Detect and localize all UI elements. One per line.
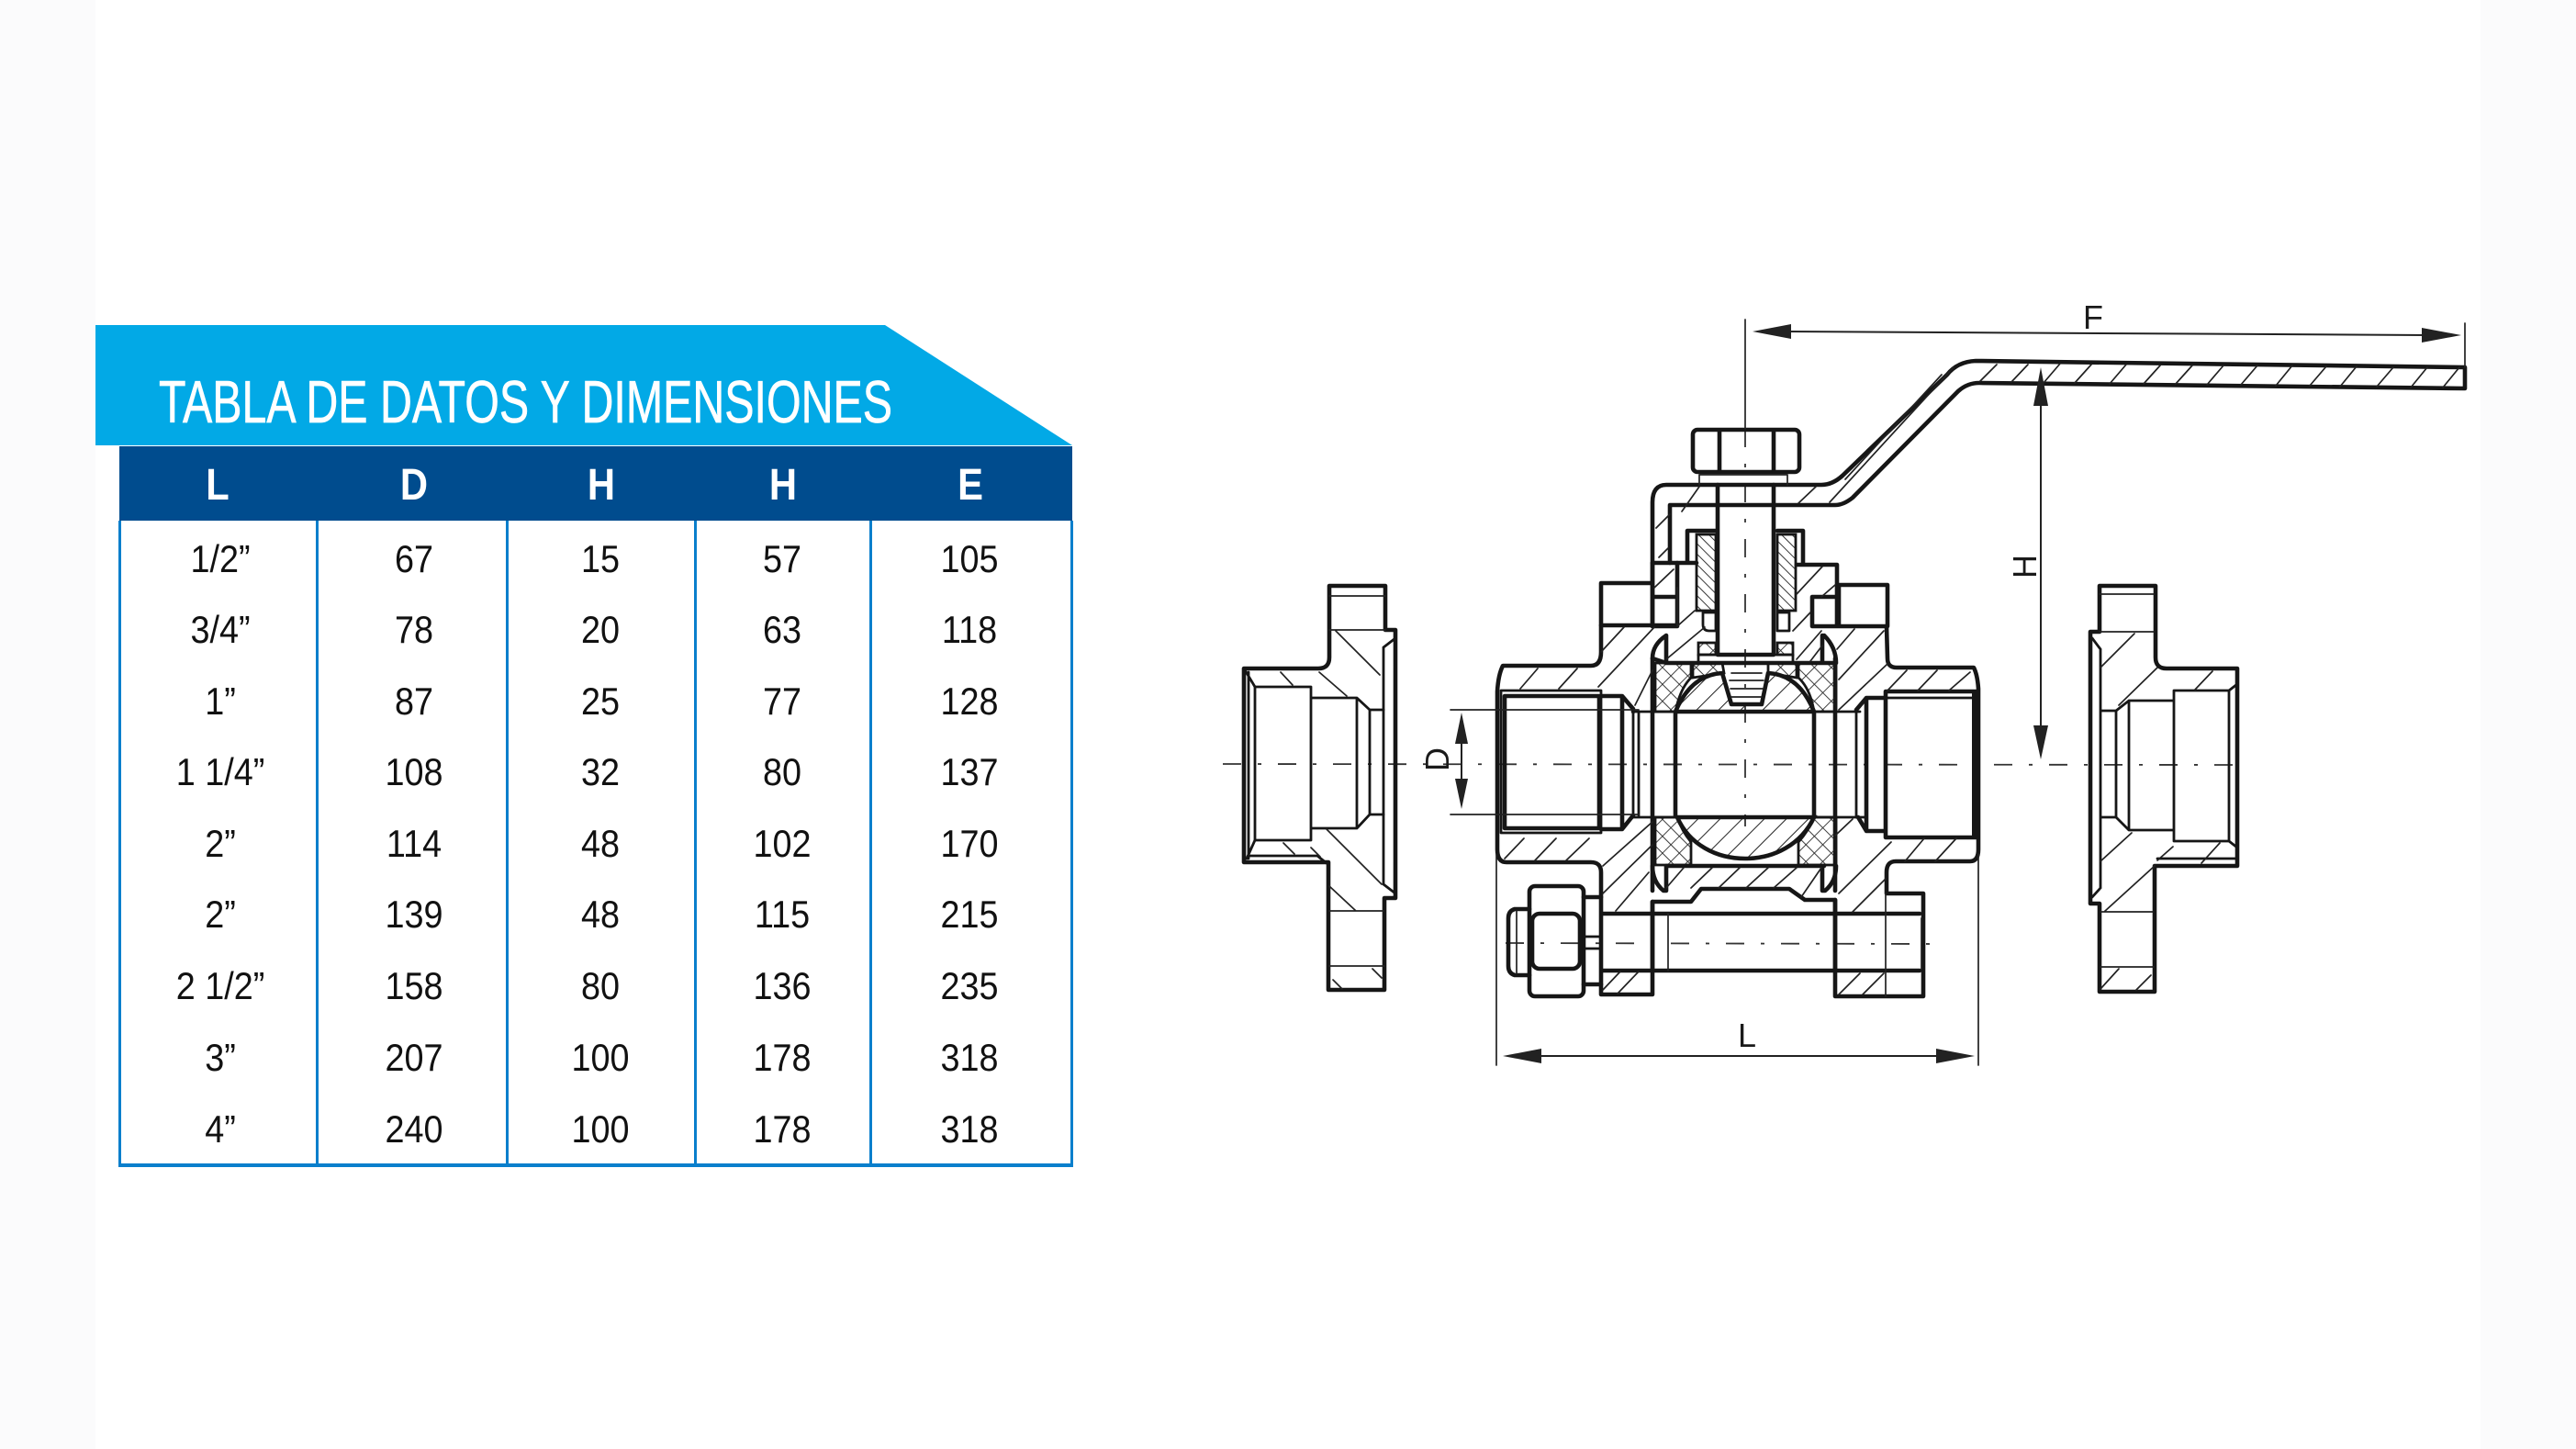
row 3/4: 118 bbox=[942, 609, 997, 651]
row 3: 318 bbox=[940, 1037, 999, 1079]
dimension F bbox=[1745, 298, 2465, 429]
dimension L bbox=[1496, 854, 1978, 1065]
row 4: 318 bbox=[940, 1108, 999, 1151]
title banner bbox=[95, 325, 1072, 445]
row 4: 240 bbox=[385, 1108, 443, 1151]
table grid bbox=[118, 521, 1073, 1167]
dimension F: F bbox=[2083, 298, 2103, 336]
table header row: E bbox=[958, 459, 983, 510]
row 3/4: 3/4” bbox=[190, 609, 251, 651]
table header row: D bbox=[400, 459, 428, 510]
stem and packing bbox=[1652, 485, 1803, 663]
row 4: 4” bbox=[205, 1108, 236, 1151]
row 2 1/2: 136 bbox=[753, 965, 812, 1007]
dimension H bbox=[2006, 367, 2048, 759]
handle lever bbox=[1652, 361, 2465, 626]
row 3/4 bbox=[190, 609, 997, 651]
row 1: 128 bbox=[940, 680, 999, 723]
row 4: 178 bbox=[753, 1108, 812, 1151]
row 1: 25 bbox=[581, 680, 620, 723]
row 1 1/4 bbox=[176, 751, 999, 793]
row 3: 207 bbox=[385, 1037, 443, 1079]
row 3/4: 63 bbox=[763, 609, 801, 651]
row 1: 87 bbox=[395, 680, 433, 723]
row 2 1/2: 80 bbox=[581, 965, 620, 1007]
row 2 1/2: 158 bbox=[385, 965, 443, 1007]
row 3: 3” bbox=[205, 1037, 236, 1079]
row 3/4: 78 bbox=[395, 609, 433, 651]
dimension L: L bbox=[1738, 1017, 1756, 1054]
ball bbox=[1652, 658, 1835, 891]
panel: ball valve technical drawing bbox=[1223, 298, 2465, 1065]
dimension H: H bbox=[2006, 555, 2044, 578]
row 1 1/4: 108 bbox=[385, 751, 443, 793]
row 2: 48 bbox=[581, 823, 620, 865]
centre lines bbox=[1223, 429, 2245, 944]
row 2: 170 bbox=[940, 823, 999, 865]
dimension D bbox=[1418, 710, 1639, 814]
row 2 second: 2” bbox=[205, 893, 236, 936]
row 2 second: 48 bbox=[581, 893, 620, 936]
row 2: 2” bbox=[205, 823, 236, 865]
row 2 second: 215 bbox=[940, 893, 999, 936]
seats bbox=[1652, 635, 1836, 891]
row 1/2: 67 bbox=[395, 538, 433, 580]
row 1/2: 57 bbox=[763, 538, 801, 580]
end bores bbox=[1501, 691, 1979, 838]
row 2: 102 bbox=[753, 823, 812, 865]
row 2 1/2: 235 bbox=[940, 965, 999, 1007]
row 2 second: 139 bbox=[385, 893, 443, 936]
row 2 second: 115 bbox=[755, 893, 810, 936]
row 1 1/4: 80 bbox=[763, 751, 801, 793]
row 4 bbox=[205, 1108, 999, 1151]
dimension D: D bbox=[1418, 747, 1456, 771]
row 2: 114 bbox=[386, 823, 442, 865]
row 2 bbox=[205, 823, 999, 865]
left flange bbox=[1244, 586, 1395, 990]
row 1/2: 1/2” bbox=[190, 538, 251, 580]
row 3/4: 20 bbox=[581, 609, 620, 651]
row 1 1/4: 1 1/4” bbox=[176, 751, 264, 793]
body hatching bbox=[1505, 567, 1970, 996]
row 1: 1” bbox=[205, 680, 236, 723]
title: TABLA DE DATOS Y DIMENSIONES bbox=[159, 368, 892, 435]
row 1 bbox=[205, 680, 999, 723]
table header row: H bbox=[588, 459, 615, 510]
row 3 bbox=[205, 1037, 999, 1079]
panel: data table bbox=[95, 325, 1073, 1167]
hex nut on stem bbox=[1693, 430, 1799, 485]
row 3: 178 bbox=[753, 1037, 812, 1079]
row 1/2: 105 bbox=[940, 538, 999, 580]
table header row: L bbox=[206, 459, 230, 510]
row 1/2 bbox=[190, 538, 999, 580]
right side band bbox=[2481, 0, 2576, 1449]
row 2 second bbox=[205, 893, 999, 936]
row 4: 100 bbox=[571, 1108, 630, 1151]
row 1: 77 bbox=[763, 680, 801, 723]
row 2 1/2 bbox=[176, 965, 999, 1007]
valve body outline bbox=[1497, 563, 1978, 996]
row 1/2: 15 bbox=[581, 538, 620, 580]
bolt and nut bbox=[1508, 886, 1668, 996]
right flange bbox=[2090, 586, 2237, 992]
left side band bbox=[0, 0, 95, 1449]
row 2 1/2: 2 1/2” bbox=[176, 965, 264, 1007]
table header row: H bbox=[769, 459, 797, 510]
row 1 1/4: 32 bbox=[581, 751, 620, 793]
row 1 1/4: 137 bbox=[940, 751, 999, 793]
row 3: 100 bbox=[571, 1037, 630, 1079]
table header row bbox=[119, 446, 1072, 521]
